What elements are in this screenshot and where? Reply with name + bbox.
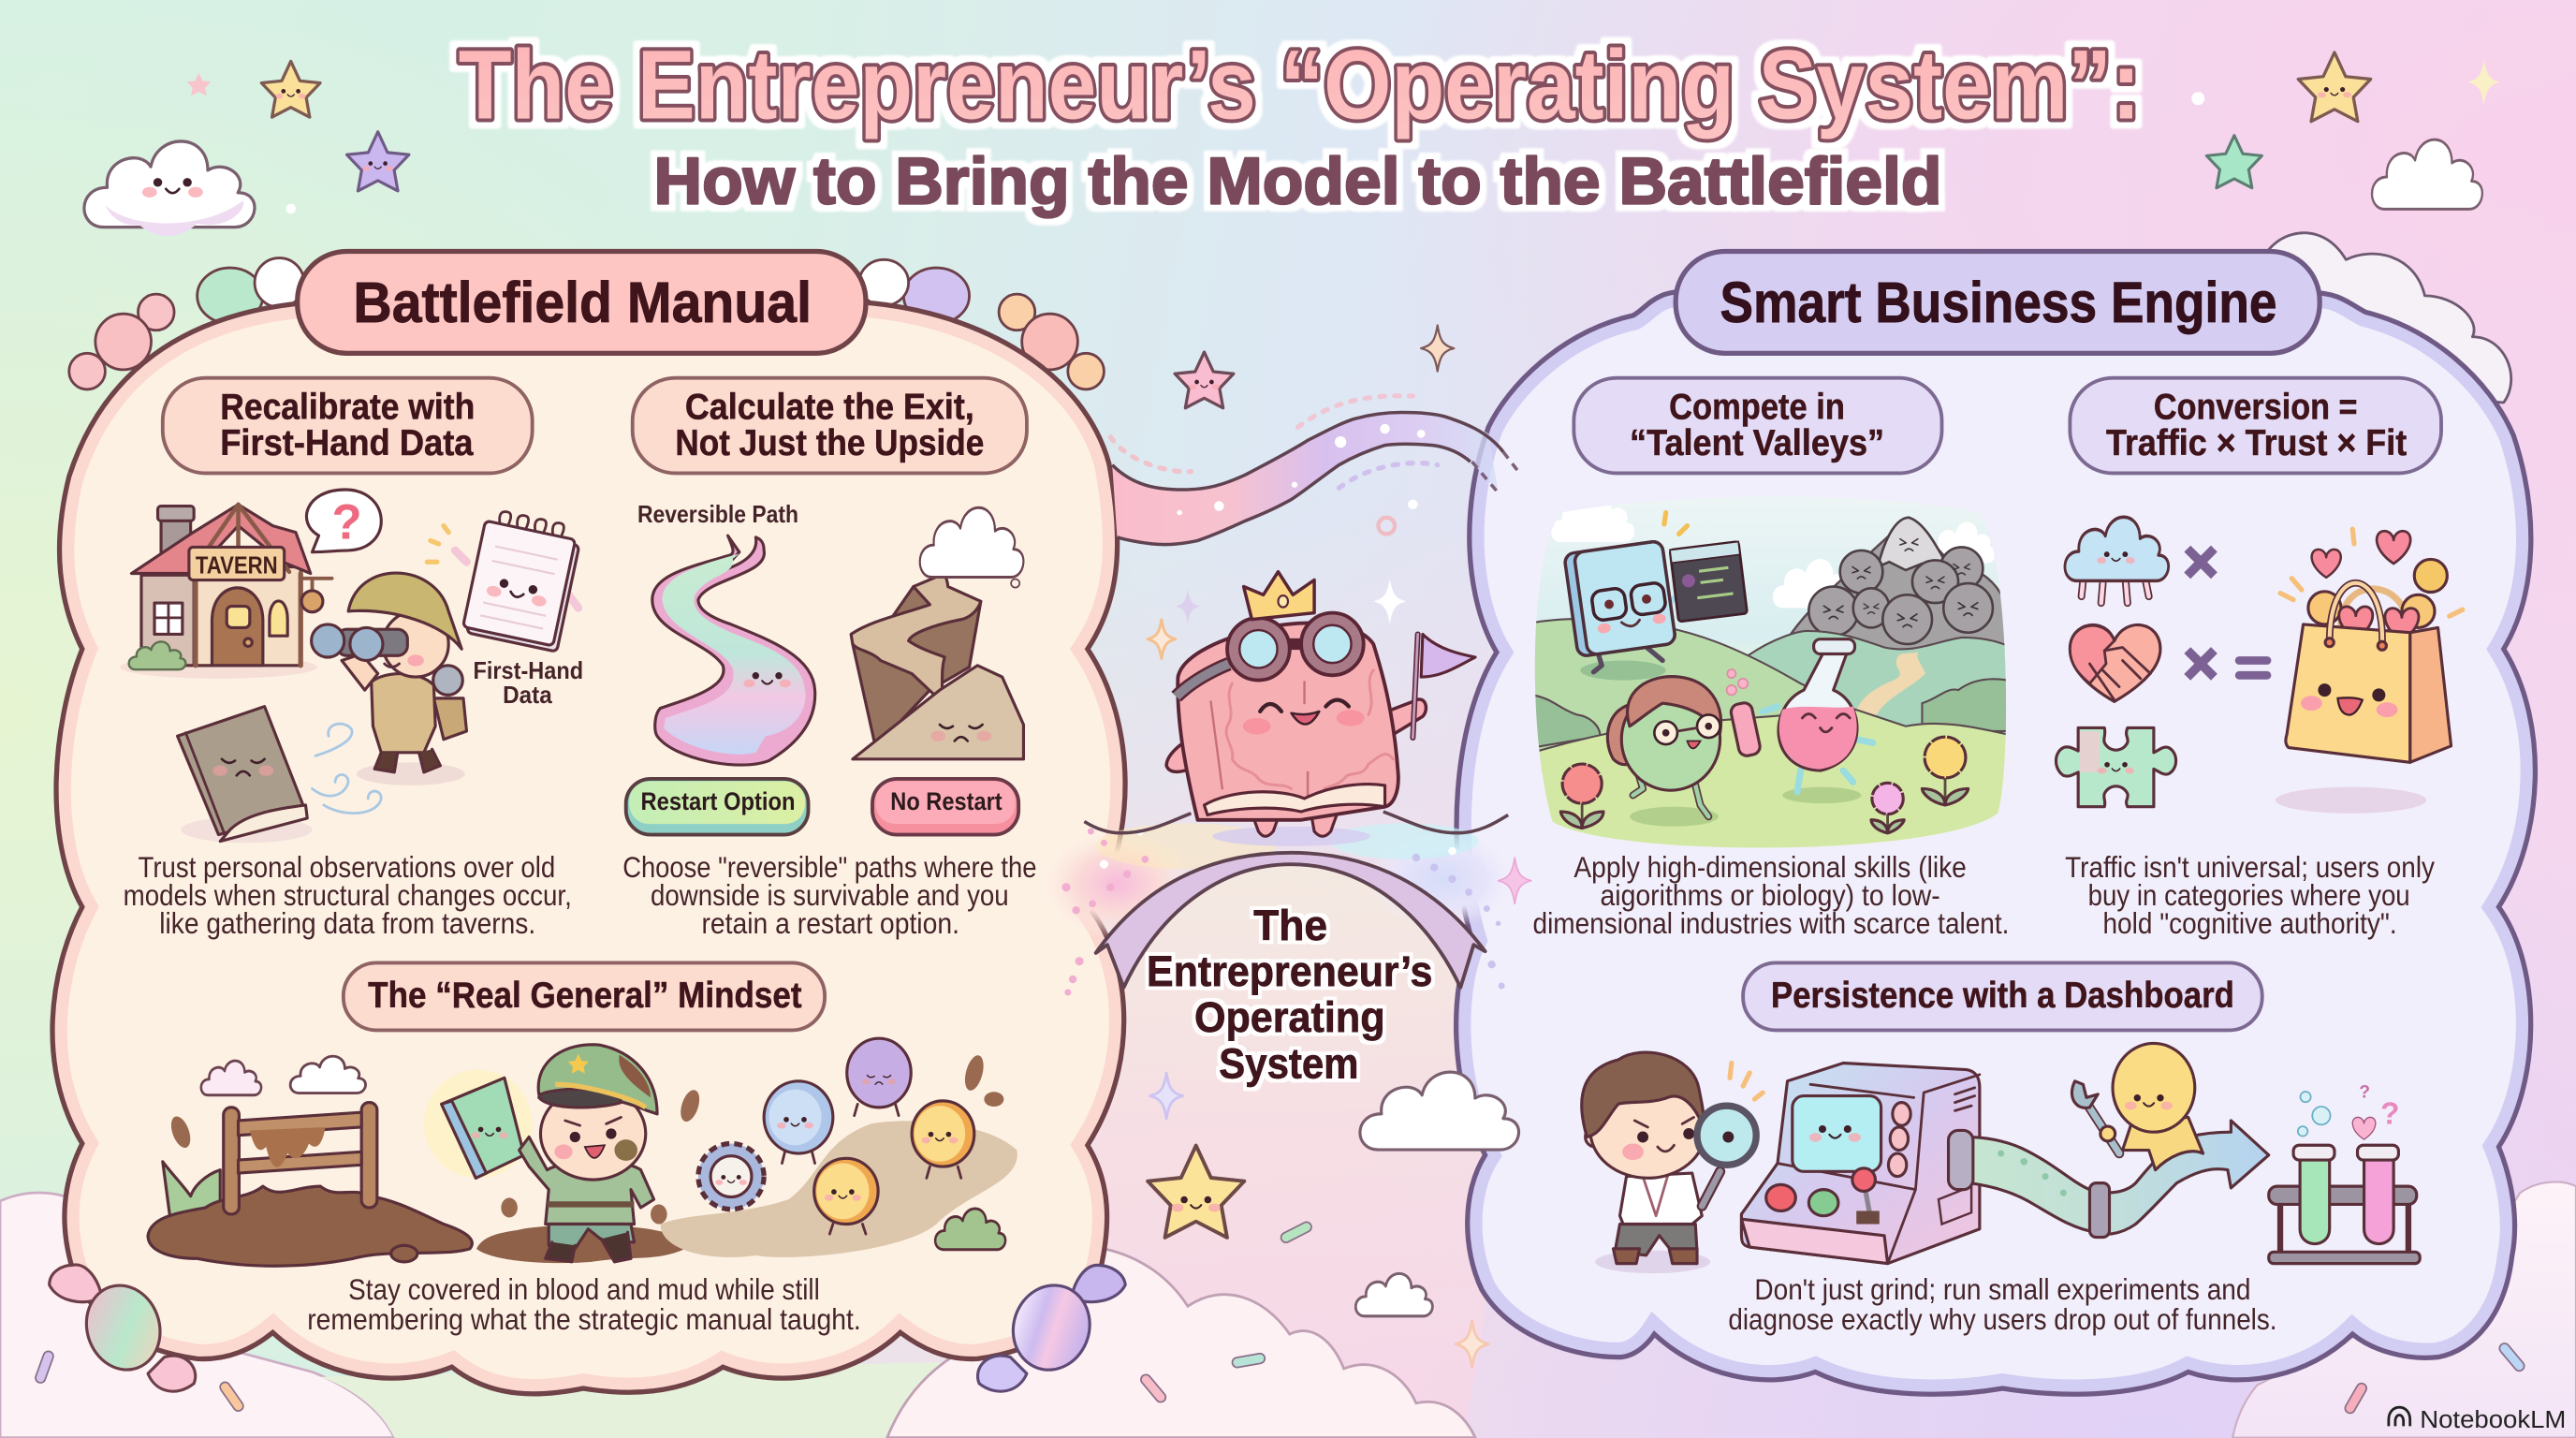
right panel: Smart Business Engine: [1456, 292, 2535, 1394]
text: recalibrate description: like gathering data from taverns.: [159, 906, 535, 940]
heading: Conversion formula: Traffic × Trust × Fit: [2106, 423, 2407, 463]
flowers: [1560, 737, 1969, 833]
heading: Recalibrate with First-Hand Data: First-Hand Data: [220, 423, 474, 463]
text: calculate the exit description: retain a restart option.: [701, 906, 959, 940]
rainbow glow beams under mascot: [1038, 823, 1516, 996]
heading: Conversion formula: Conversion =: [2154, 388, 2358, 428]
left panel: Battlefield Manual: [52, 302, 1125, 1394]
illustration: tavern: TAVERN: [196, 553, 278, 580]
mascot goggles: [1177, 613, 1364, 697]
heading: Compete in Talent Valleys: Compete in: [1669, 388, 1845, 428]
connecting ribbon top: [1110, 396, 1519, 545]
illustration: general with manual: [424, 1045, 703, 1263]
heading: Recalibrate with First-Hand Data: [163, 378, 533, 473]
button: No Restart: No Restart: [890, 786, 1003, 815]
central label: [1147, 902, 1432, 1087]
button: Restart Option: [626, 779, 809, 835]
NotebookLM watermark: NotebookLM: [2420, 1405, 2566, 1433]
central label: System: [1219, 1039, 1358, 1087]
illustration: old dusty book: [178, 707, 381, 843]
heading: Recalibrate with First-Hand Data: Recalibrate with: [220, 388, 475, 428]
label: First-Hand Data: Data: [503, 682, 553, 709]
text: conversion description: [2065, 850, 2435, 940]
label: Reversible Path: Reversible Path: [637, 502, 798, 528]
illustration: reversible path ribbon: [652, 536, 815, 765]
illustration: dashboard machine: [1741, 1064, 1980, 1264]
character: algorithm book with glasses: [1564, 513, 1748, 672]
mascot arms: [1166, 699, 1426, 771]
character: green blob scientist: [1607, 669, 1762, 816]
button: No Restart: [872, 779, 1018, 835]
mascot crown: [1244, 572, 1314, 620]
illustration: first-hand data notepad: [455, 507, 583, 652]
pill: Smart Business Engine heading: Smart Business Engine: [1720, 271, 2277, 335]
text: calculate the exit description: [622, 850, 1036, 940]
central label: Operating: [1194, 993, 1385, 1041]
central arch interior: [1097, 864, 1486, 1438]
pill: Battlefield Manual heading: [298, 252, 866, 353]
subtitle: How to Bring the Model to the Battlefield: [654, 144, 1942, 218]
heading: Compete in Talent Valleys: “Talent Valleys”: [1630, 423, 1884, 463]
illustration: test tubes with bubbles: ?: [2359, 1082, 2370, 1102]
sprinkles: [34, 1221, 2526, 1415]
text: calculate the exit description: downside is survivable and you: [651, 878, 1009, 912]
text: conversion description: hold "cognitive authority".: [2102, 906, 2397, 940]
illustration: test tubes with bubbles: ?: [2380, 1096, 2399, 1131]
central mascot: brain book explorer: [1166, 572, 1475, 846]
heading: The Real General Mindset: The “Real General” Mindset: [368, 976, 802, 1016]
character: pink flask: [1763, 639, 1873, 792]
text: dashboard description: Don't just grind; run small experiments and: [1754, 1272, 2250, 1306]
illustration: tavern: [120, 505, 332, 679]
decorative clouds: [84, 139, 2482, 1316]
heading: Conversion formula: [2070, 378, 2441, 473]
text: talent valleys description: [1532, 850, 2009, 940]
icon: shopping bag: [2276, 529, 2463, 814]
text: recalibrate description: [124, 850, 572, 940]
heading: Persistence with a Dashboard: [1743, 962, 2262, 1030]
illustration: collapsed cliff and smoke: [851, 507, 1023, 759]
illustration: mud road with coins and gear: [661, 1038, 1017, 1257]
icon: multiply sign 1: ×: [2184, 529, 2218, 594]
illustration: muddy fence: [148, 1056, 472, 1266]
text: recalibrate description: models when structural changes occur,: [124, 878, 572, 912]
illustration: talent valley scene: [1535, 506, 2007, 848]
mascot face: [1243, 700, 1365, 734]
lower wave line: [1084, 812, 1508, 833]
button: Restart Option: Restart Option: [641, 786, 795, 815]
text: talent valleys description: dimensional industries with scarce talent.: [1532, 906, 2009, 940]
label: First-Hand Data: First-Hand: [474, 658, 583, 684]
text: real general description: [307, 1272, 861, 1336]
top-right cloud behind right panel: [2261, 233, 2511, 403]
text: talent valleys description: aigorithms or biology) to low-: [1600, 878, 1940, 912]
mascot brain folds: [1211, 682, 1308, 801]
mascot flag: [1412, 634, 1475, 738]
character: yellow mechanic: [2071, 1043, 2203, 1170]
mascot book pages: [1204, 785, 1385, 814]
label: First-Hand Data: [474, 658, 583, 709]
icon: trust heart handshake: [2070, 624, 2160, 701]
text: real general description: Stay covered in blood and mud while still: [348, 1272, 820, 1306]
heading: Calculate the Exit: Calculate the Exit,: [685, 388, 974, 428]
mascot brain body: [1178, 623, 1398, 820]
heading: The Real General Mindset: [344, 962, 825, 1030]
illustration: test tubes with bubbles: [2269, 1082, 2420, 1264]
icon: equals sign: [2239, 661, 2267, 675]
text: dashboard description: [1728, 1272, 2277, 1336]
candy bottom left: [50, 1265, 196, 1391]
text: talent valleys description: Apply high-dimensional skills (like: [1573, 850, 1967, 884]
central label: The: [1253, 902, 1327, 949]
icon: question bubble: [306, 490, 381, 552]
main title: The Entrepreneur’s “Operating System”:: [459, 30, 2141, 139]
illustration: explorer with binoculars: [312, 526, 466, 785]
heading: Persistence with a Dashboard: Persistence with a Dashboard: [1771, 976, 2234, 1016]
central label: Entrepreneur’s: [1147, 947, 1432, 995]
text: recalibrate description: Trust personal observations over old: [138, 850, 555, 884]
icon: fit puzzle piece: [2056, 727, 2176, 807]
heading: Compete in Talent Valleys: [1573, 378, 1942, 473]
text: real general description: remembering what the strategic manual taught.: [307, 1302, 861, 1336]
central arch band: [1096, 853, 1486, 988]
text: conversion description: Traffic isn't universal; users only: [2065, 850, 2435, 884]
icon: traffic cloud: [2065, 517, 2169, 603]
candy decorations top of left panel: [69, 258, 1104, 389]
pill: Battlefield Manual heading: Battlefield Manual: [353, 271, 812, 335]
text: calculate the exit description: Choose "reversible" paths where the: [622, 850, 1036, 884]
candy bottom right: [977, 1265, 1125, 1391]
text: dashboard description: diagnose exactly why users drop out of funnels.: [1728, 1302, 2277, 1336]
bottom clouds: [0, 1182, 2576, 1438]
heading: Calculate the Exit: [633, 378, 1027, 473]
icon: question bubble: ?: [332, 495, 362, 550]
illustration: analyst with magnifying glass: [1582, 1052, 1763, 1273]
icon: multiply sign 2: ×: [2184, 631, 2218, 697]
pill: Smart Business Engine heading: [1676, 252, 2320, 353]
text: conversion description: buy in categories where you: [2088, 878, 2410, 912]
smiling cloud top-left: [84, 141, 255, 236]
illustration: funnel pipe with arrow: [1949, 1121, 2269, 1238]
heading: Calculate the Exit: Not Just the Upside: [675, 423, 984, 463]
